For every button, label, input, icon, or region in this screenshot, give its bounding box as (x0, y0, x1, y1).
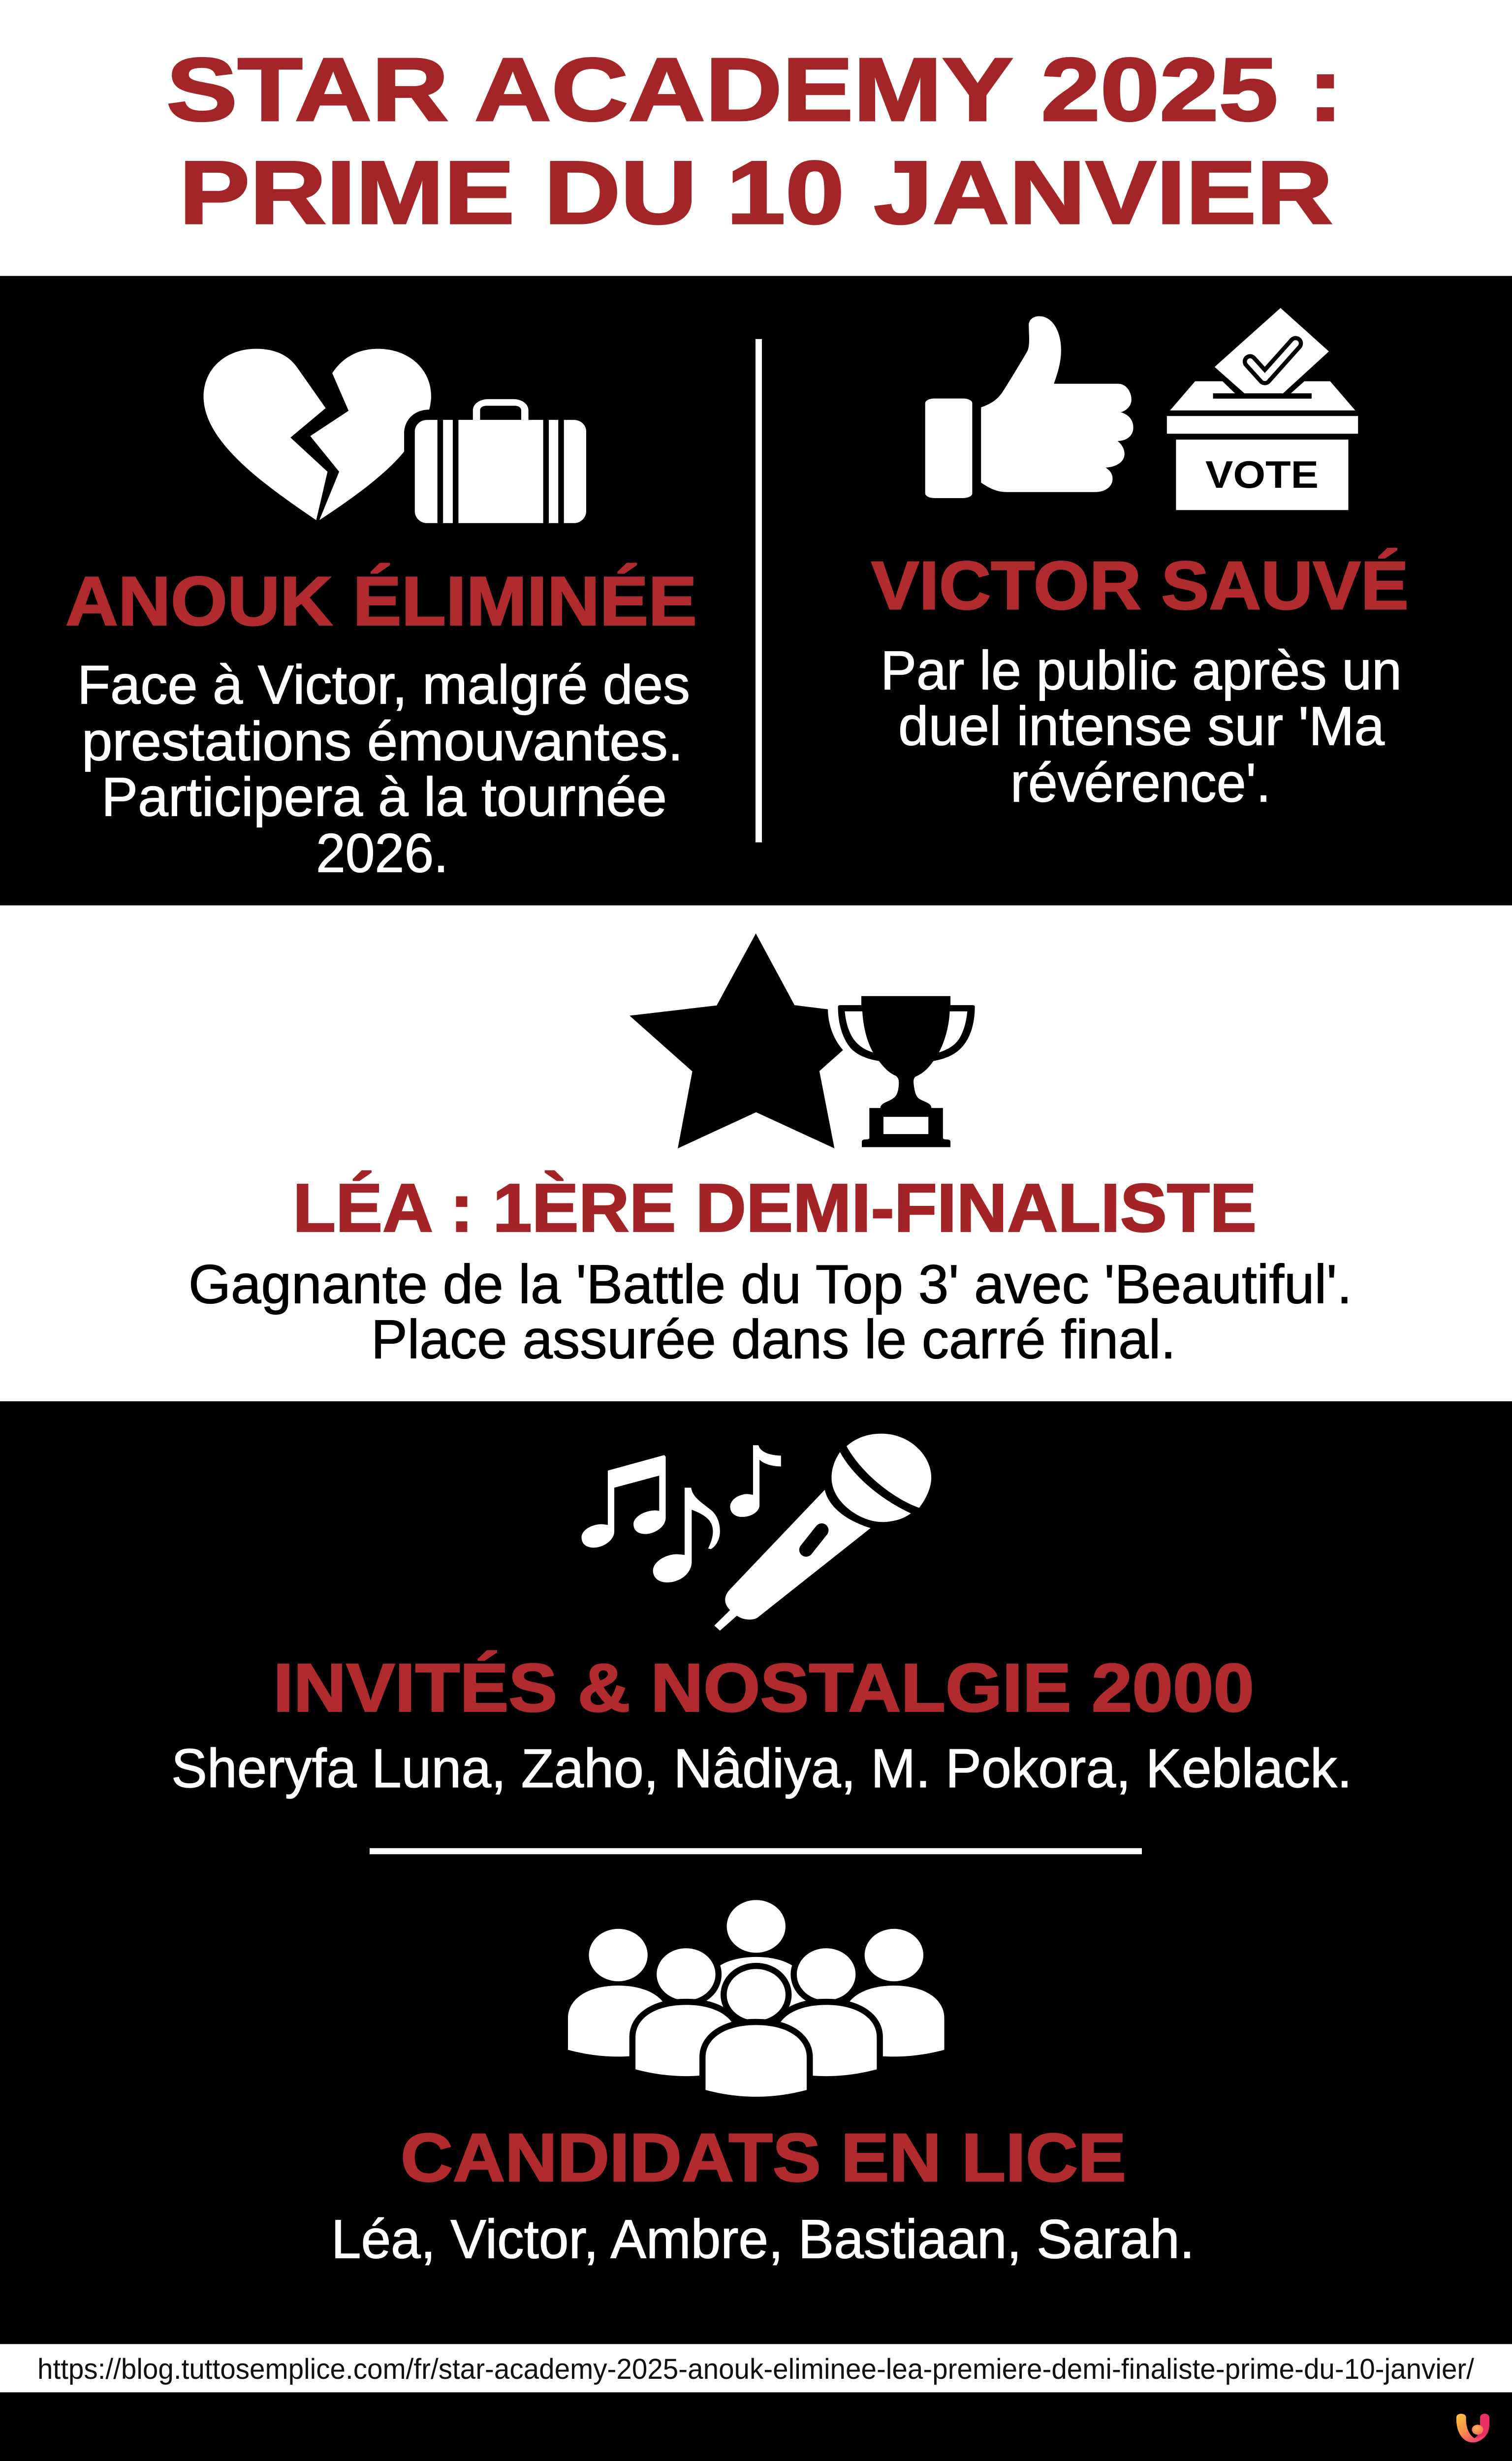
icon: broken heart and suitcase (204, 349, 586, 523)
icon: star and trophy (630, 933, 975, 1148)
text: Léa: Gagnante de la 'Battle du Top 3' avec 'Beautiful'. (189, 1254, 1352, 1315)
text: candidats: Léa, Victor, Ambre, Bastiaan, Sarah. (331, 2209, 1195, 2270)
icon: group of people (568, 1900, 945, 2097)
panel: Anouk et Victor (0, 276, 1512, 905)
heading: candidats: CANDIDATS EN LICE (401, 2120, 1126, 2196)
text: Victor: duel intense sur 'Ma (898, 695, 1385, 757)
icon: logo (1456, 2414, 1489, 2442)
text: Anouk (77, 655, 690, 884)
panel: footer (0, 2392, 1512, 2461)
heading: Léa: LÉA : 1ÈRE DEMI-FINALISTE (293, 1170, 1257, 1246)
text: Anouk: prestations émouvantes. (82, 711, 683, 772)
panel: header (0, 0, 1512, 276)
text: Victor (881, 640, 1402, 814)
text: Victor: Par le public après un (881, 640, 1402, 701)
heading: Anouk éliminée: ANOUK ÉLIMINÉE (65, 562, 697, 640)
panel: Léa (0, 905, 1512, 1401)
icon: thumbs up and ballot box (925, 308, 1358, 510)
heading: Victor sauvé: VICTOR SAUVÉ (871, 548, 1409, 624)
heading: invités: INVITÉS & NOSTALGIE 2000 (273, 1650, 1254, 1726)
title: PRIME DU 10 JANVIER (179, 143, 1333, 243)
title (166, 40, 1343, 243)
icon: music notes and microphone (582, 1434, 931, 1631)
text: invités: Sheryfa Luna, Zaho, Nâdiya, M. Pokora, Keblack. (171, 1738, 1352, 1799)
panel: invités et candidats (0, 1401, 1512, 2344)
icon: thumbs up and ballot box: VOTE (1205, 453, 1319, 496)
text: Anouk: Face à Victor, malgré des (77, 655, 690, 716)
text: Victor: révérence'. (1010, 752, 1271, 814)
text: Léa (189, 1254, 1352, 1370)
text: Anouk: 2026. (316, 822, 448, 884)
panel: source URL (0, 2344, 1512, 2392)
text: Léa: Place assurée dans le carré final. (371, 1309, 1176, 1370)
text: Anouk: Participera à la tournée (101, 766, 667, 828)
title: STAR ACADEMY 2025 : (166, 40, 1343, 140)
